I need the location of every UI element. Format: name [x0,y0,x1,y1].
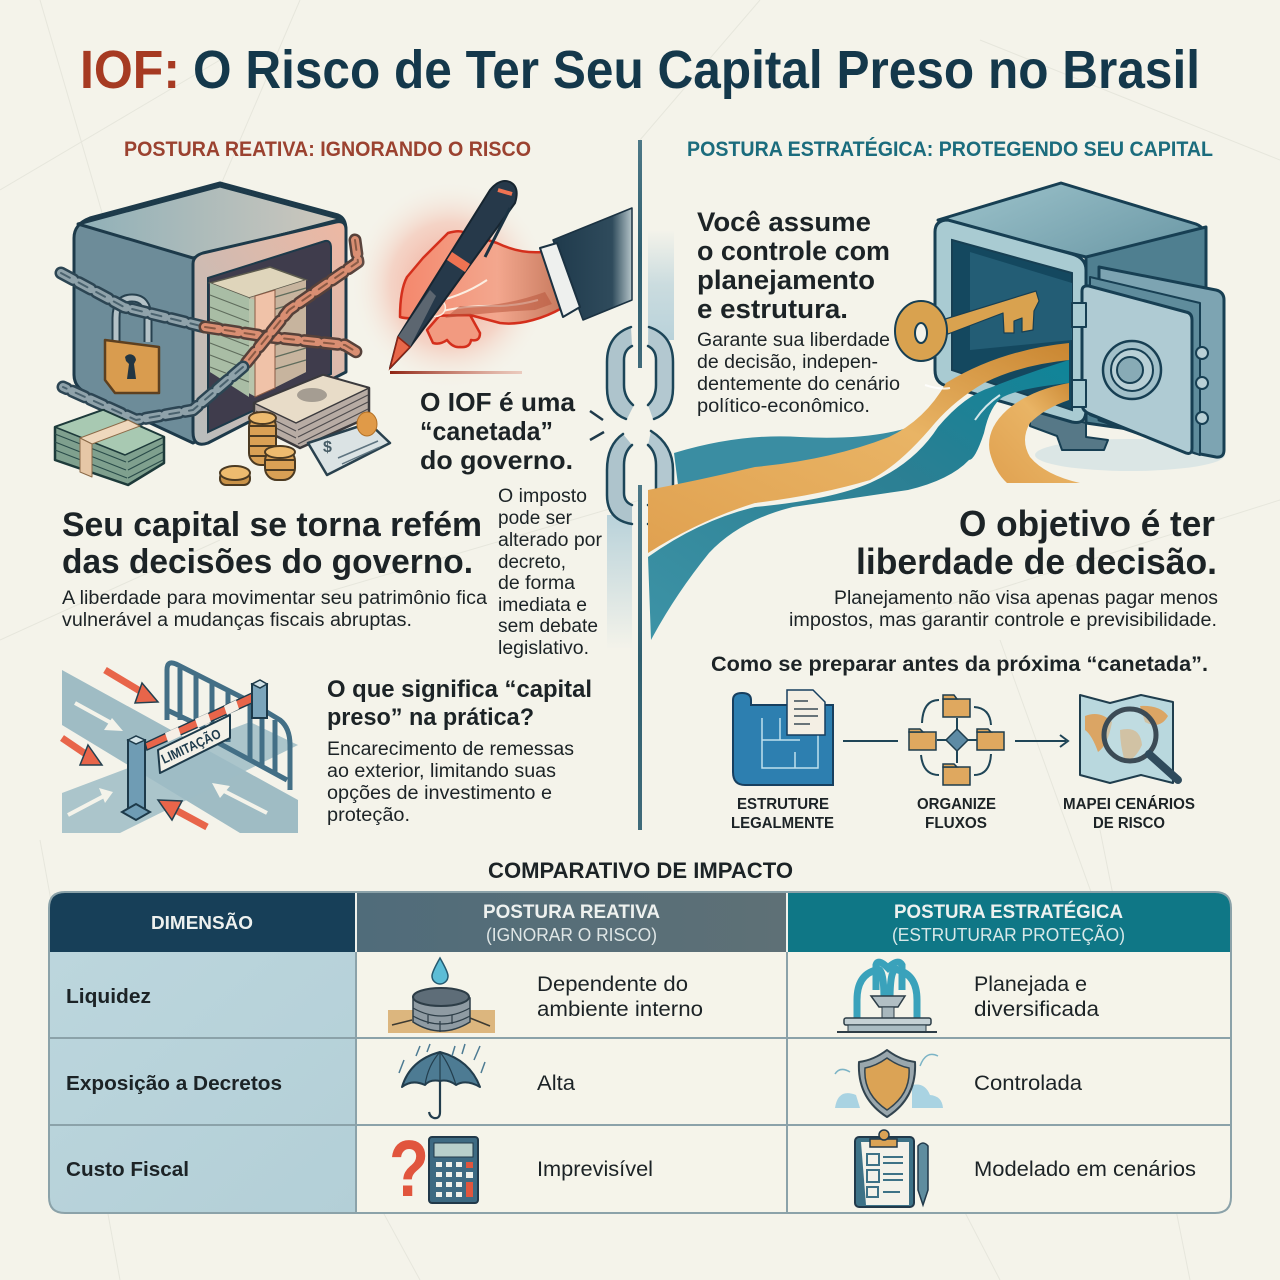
icon: question mark and calculator: ? [389,1124,429,1213]
barrier arrows [62,670,267,827]
heading: comparativo de impacto: COMPARATIVO DE IMPACTO [488,858,793,883]
icon: question mark and calculator [389,1124,478,1213]
illustration: chained safe with money [55,183,390,485]
illustration: hand signing with pen [350,180,632,390]
heading: postura estratégica: POSTURA ESTRATÉGICA: PROTEGENDO SEU CAPITAL [687,138,1213,161]
table header labels [151,901,1125,945]
check: $ [323,439,332,456]
safe door [1072,267,1224,457]
text: você assume o controle [697,207,900,417]
text: imposto alterado por decreto: imediata e [498,595,587,616]
text: imposto alterado por decreto: O imposto [498,486,587,507]
text: você assume o controle: Garante sua liberdade [697,330,890,351]
table values reativa: ambiente interno [537,998,703,1021]
text: o objetivo é ter liberdade: O objetivo é ter [959,503,1215,544]
text: o que significa capital preso: Encarecimento de remessas [327,739,574,760]
text: imposto alterado por decreto: de forma [498,573,575,594]
icon: map with magnifier [1080,695,1178,783]
text: o IOF é uma canetada: O IOF é uma [420,387,576,417]
table values reativa: Dependente do [537,973,688,996]
table header labels: POSTURA ESTRATÉGICA [894,901,1123,923]
text: você assume o controle: e estrutura. [697,294,848,324]
comparison table [49,892,1231,1213]
check [308,412,390,475]
title: O Risco de Ter Seu Capital Preso no Brasil [193,40,1200,100]
table values reativa: Alta [537,1072,575,1095]
text: capital refém: A liberdade para movimentar seu patrimônio fica [62,588,487,609]
golden key [895,291,1039,361]
text: imposto alterado por decreto: sem debate [498,616,598,637]
labels: prepare steps: DE RISCO [1093,815,1165,832]
text: o objetivo é ter liberdade: liberdade de decisão. [856,541,1217,582]
table values estratégica: Controlada [974,1072,1082,1095]
text: o que significa capital preso [327,676,592,826]
line to organize [843,740,898,742]
text: você assume o controle: planejamento [697,265,875,295]
table values reativa: Imprevisível [537,1158,653,1181]
text: o que significa capital preso: preso” na prática? [327,704,534,731]
table row labels [66,986,282,1181]
icon: clipboard checklist [855,1130,928,1207]
text: você assume o controle: de decisão, indepen- [697,352,878,373]
illustration: barrier limitação [62,663,298,833]
illustration: open safe with key and flows [648,183,1225,640]
table values estratégica: diversificada [974,998,1099,1021]
table header labels: POSTURA REATIVA [483,902,660,923]
text: você assume o controle: dentemente do cenário [697,374,900,395]
labels: prepare steps: ESTRUTURE [737,796,829,813]
illustration: barrier limitação: LIMITAÇÃO [159,726,223,767]
text: o que significa capital preso: ao exterior, limitando suas [327,761,556,782]
text: o que significa capital preso: O que significa “capital [327,676,592,703]
banknotes stack [254,375,369,448]
text: capital refém [62,506,487,631]
icon: organize folders [909,695,1004,785]
text: você assume o controle: o controle com [697,236,890,266]
text: capital refém: vulnerável a mudanças fiscais abruptas. [62,610,412,631]
icon: fountain [837,962,937,1032]
text: o IOF é uma canetada [420,387,576,475]
labels: prepare steps: FLUXOS [925,815,987,832]
text: o que significa capital preso: opções de investimento e [327,783,552,804]
text: o objetivo é ter liberdade: Planejamento não visa apenas pagar menos [834,588,1218,609]
text: capital refém: Seu capital se torna refém [62,506,482,544]
table header labels: DIMENSÃO [151,912,253,933]
labels: prepare steps: LEGALMENTE [731,815,834,832]
text: imposto alterado por decreto: decreto, [498,552,566,573]
text: imposto alterado por decreto [498,486,603,659]
table header labels: (IGNORAR O RISCO) [486,925,657,945]
padlock [105,298,159,393]
icon: umbrella in rain [399,1044,485,1118]
text: imposto alterado por decreto: pode ser [498,508,573,529]
icon: blueprint [733,690,833,785]
labels: prepare steps: MAPEI CENÁRIOS [1063,794,1195,813]
heading: postura reativa: POSTURA REATIVA: IGNORANDO O RISCO [124,138,531,161]
suit sleeve [553,208,632,320]
chains [61,240,358,420]
table values estratégica: Planejada e [974,973,1087,996]
icon: shield with clouds [835,1050,943,1117]
table values reativa [537,973,703,1181]
fingers [427,315,480,347]
central divider with broken chain [590,140,674,830]
heading: como se preparar: Como se preparar antes da próxima “canetada”. [711,653,1208,676]
text: o IOF é uma canetada: “canetada” [420,416,553,446]
text: o objetivo é ter liberdade: impostos, mas garantir controle e previsibilidade. [789,610,1217,631]
table row labels: Liquidez [66,986,151,1008]
text: o que significa capital preso: proteção. [327,805,410,826]
pen [390,181,517,368]
table row labels: Custo Fiscal [66,1159,189,1181]
text: o IOF é uma canetada: do governo. [420,445,573,475]
text: você assume o controle: político-econômico. [697,396,870,417]
text: capital refém: das decisões do governo. [62,543,473,581]
table values estratégica: Modelado em cenários [974,1158,1196,1181]
table row labels: Exposição a Decretos [66,1073,282,1095]
table header labels: (ESTRUTURAR PROTEÇÃO) [892,924,1125,945]
text: imposto alterado por decreto: legislativo. [498,638,589,659]
title: IOF: [80,40,180,100]
labels: prepare steps: ORGANIZE [917,796,996,813]
table values estratégica [974,973,1196,1181]
labels: prepare steps [731,794,1195,832]
text: imposto alterado por decreto: alterado por [498,530,603,551]
arrow to map [1015,735,1068,747]
coins [220,412,295,485]
text: você assume o controle: Você assume [697,207,871,237]
flow ribbons [648,343,1080,640]
cash stack front [55,410,164,485]
text: o objetivo é ter liberdade [789,503,1218,631]
icon: dry well [388,958,495,1033]
